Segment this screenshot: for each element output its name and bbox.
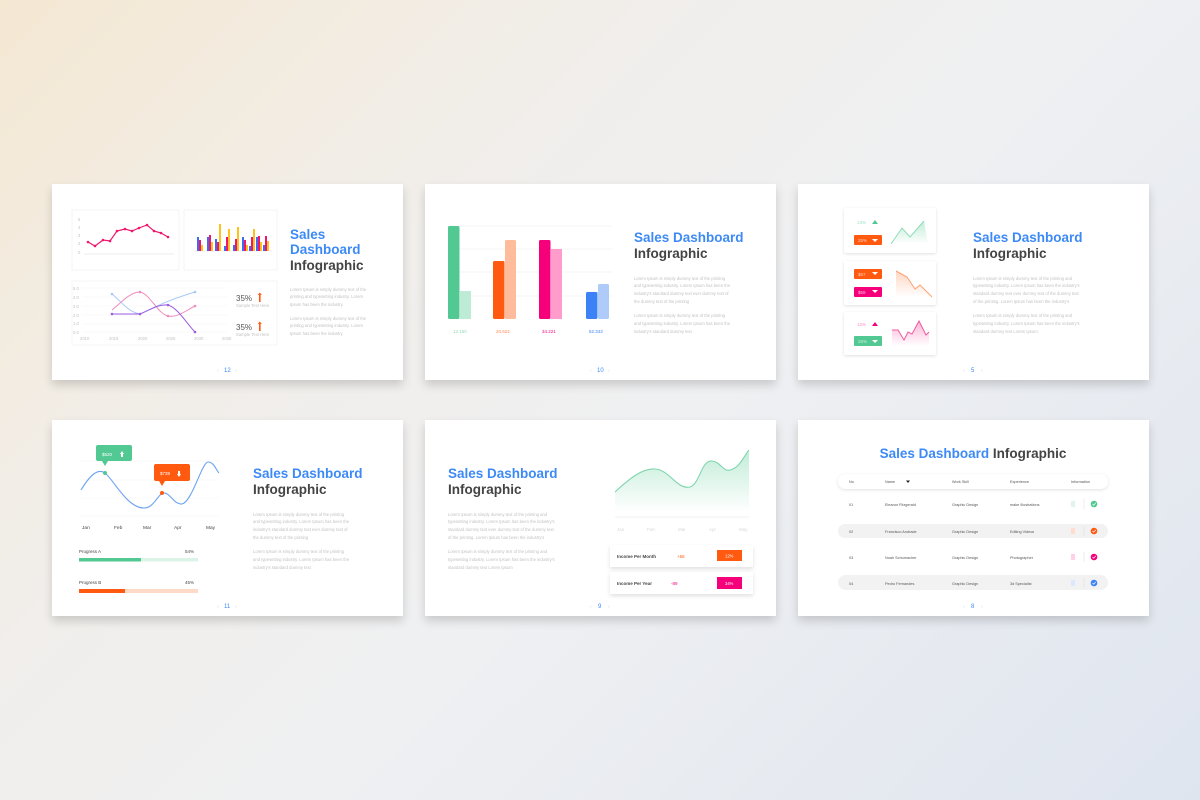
text block: and typesetting industry. Lorem Ipsum has been the <box>634 283 731 288</box>
card: income per month: Income Per Month <box>617 554 656 559</box>
panel: multi-line chart with stats: 2030 <box>194 336 204 341</box>
table: Graphic Design <box>952 503 978 507</box>
bar chart <box>448 226 612 334</box>
slide 2: bar chart <box>425 184 776 380</box>
table: No <box>849 480 854 484</box>
page number: ‹ <box>217 604 219 610</box>
slide 6: table <box>798 420 1149 616</box>
wave chart: Apr <box>174 525 182 531</box>
panel: multi-line chart with stats <box>72 281 277 345</box>
progress A: Progress A <box>79 549 101 554</box>
page number <box>590 368 610 374</box>
title: Infographic <box>634 246 708 261</box>
wave chart: $739 <box>160 471 171 476</box>
panel: multi-line chart with stats: 2020 <box>138 336 148 341</box>
title: Infographic <box>253 482 327 497</box>
table: 01 <box>849 503 853 507</box>
table: make Illustrations <box>1010 503 1040 507</box>
table: Eleanor Fitzgerald <box>885 503 916 507</box>
panel: pink line chart: 6 <box>78 217 81 222</box>
area chart: May <box>739 527 748 532</box>
table: Graphic Design <box>952 530 978 534</box>
text block: of the printing. Lorem Ipsum has been the industry's <box>973 299 1069 304</box>
progress A <box>79 549 198 562</box>
title: Sales Dashboard <box>448 466 558 481</box>
text block: Lorem Ipsum is simply dummy text of the printing <box>634 313 726 318</box>
text block: typesetting industry. Lorem Ipsum has been the industry's <box>973 321 1080 326</box>
text block: Lorem Ipsum is simply dummy text of the printing <box>253 512 345 517</box>
text block <box>448 512 555 570</box>
title: Sales Dashboard Infographic <box>880 446 1067 461</box>
title <box>634 230 744 261</box>
page number <box>217 368 237 374</box>
bar chart: 52.343 <box>589 329 603 334</box>
title <box>448 466 558 497</box>
text block: standard dummy text ever dummy text of the dummy text <box>973 291 1079 296</box>
area chart: Jan <box>617 527 625 532</box>
table: Photographer <box>1010 556 1034 560</box>
table <box>838 474 1108 590</box>
text block: the dummy text of the printing <box>253 535 309 540</box>
card: income per year: 34% <box>725 581 734 586</box>
page number: 8 <box>971 604 975 610</box>
wave chart <box>80 445 219 531</box>
text block: Lorem Ipsum is simply dummy text of the printing and <box>973 313 1073 318</box>
page number: › <box>235 368 237 374</box>
text block: industry's standard dummy text <box>634 329 693 334</box>
table: Name <box>885 480 895 484</box>
progress B <box>79 580 198 593</box>
text block: Ipsum has been the industry. <box>290 302 344 307</box>
text block: standard dummy text Lorem Ipsum <box>448 565 513 570</box>
wave chart: $520 <box>102 452 113 457</box>
panel: multi-line chart with stats: 2010 <box>80 336 90 341</box>
slide 3: KPI sparkline cards <box>798 184 1149 380</box>
page number: › <box>608 368 610 374</box>
title: Infographic <box>448 482 522 497</box>
page number <box>217 604 237 610</box>
text block: and typesetting industry. Lorem Ipsum has been the <box>253 519 350 524</box>
slide 5: area chart with income cards <box>425 420 776 616</box>
bar chart: 20.622 <box>496 329 510 334</box>
text block: and typesetting industry. Lorem Ipsum has been the <box>634 321 731 326</box>
card 1 <box>844 208 936 253</box>
panel: multi-line chart with stats: 2015 <box>109 336 119 341</box>
text block: Lorem Ipsum is simply dummy text of the <box>290 287 367 292</box>
page number: 10 <box>597 368 604 374</box>
panel: pink line chart <box>72 210 179 270</box>
page number: › <box>608 604 610 610</box>
card: income per year <box>610 572 753 594</box>
title <box>253 466 363 497</box>
bar chart: 34.221 <box>542 329 556 334</box>
text block: industry's standard dummy text <box>253 565 312 570</box>
page number: › <box>235 604 237 610</box>
text block <box>634 276 731 334</box>
title: Sales Dashboard <box>253 466 363 481</box>
page number: 9 <box>598 604 602 610</box>
text block: Lorem Ipsum is simply dummy text of the printing and <box>448 512 548 517</box>
panel: pink line chart: 0 <box>78 250 81 255</box>
wave chart: Feb <box>114 525 123 531</box>
panel: multi-line chart with stats: 2.0 <box>73 313 79 318</box>
panel: multi-line chart with stats: 0.0 <box>73 330 79 335</box>
text block: industry's standard dummy text ever dummy text of <box>634 291 729 296</box>
title: Dashboard <box>290 242 361 257</box>
area chart: Mar <box>678 527 686 532</box>
card 2: $59 <box>858 290 866 295</box>
table: 3d Specialist <box>1010 582 1032 586</box>
text block: typesetting industry. Lorem Ipsum has been the industry's <box>973 283 1080 288</box>
title: Sales Dashboard <box>634 230 744 245</box>
text block <box>253 512 350 570</box>
bar chart: 12.150 <box>453 329 467 334</box>
title: Sales Dashboard <box>973 230 1083 245</box>
card: income per month: 12% <box>725 554 734 558</box>
card 3 <box>844 312 936 355</box>
panel: pink line chart: 3 <box>78 233 81 238</box>
page number <box>963 368 983 374</box>
card 2: $67 <box>858 272 866 277</box>
panel: multi-line chart with stats: 3.0 <box>73 304 79 309</box>
text block: Ipsum has been the industry. <box>290 331 344 336</box>
panel: multi-line chart with stats: 5.0 <box>73 286 79 291</box>
page number: › <box>981 368 983 374</box>
text block: Lorem Ipsum is simply dummy text of the printing <box>634 276 726 281</box>
text block: printing and typesetting industry. Lorem <box>290 294 364 299</box>
text block <box>290 287 367 336</box>
card: income per month <box>610 545 753 567</box>
page number: 5 <box>971 368 975 374</box>
slide 1: line, bar and multi-line charts <box>52 184 403 380</box>
wave chart: Jan <box>82 525 90 531</box>
table: Graphic Design <box>952 582 978 586</box>
page number: 12 <box>224 368 231 374</box>
text block <box>973 276 1080 334</box>
panel: multi-line chart with stats: Sample Text Here <box>236 303 270 308</box>
title <box>290 227 364 273</box>
table: Noah Schumacher <box>885 556 917 560</box>
area chart <box>615 450 749 532</box>
text block: Lorem Ipsum is simply dummy text of the printing and <box>973 276 1073 281</box>
panel: grouped bar chart <box>184 210 277 270</box>
panel: multi-line chart with stats: 1.0 <box>73 321 79 326</box>
panel: multi-line chart with stats: 35% <box>236 323 252 332</box>
panel: multi-line chart with stats: 35% <box>236 294 252 303</box>
card: income per year: Income Per Year <box>617 581 652 586</box>
card 2 <box>844 261 936 305</box>
table: Information <box>1071 480 1090 484</box>
text block: Lorem Ipsum is simply dummy text of the printing <box>253 549 345 554</box>
title: Infographic <box>973 246 1047 261</box>
page number <box>590 604 610 610</box>
table: 03 <box>849 556 853 560</box>
slide 4: wave chart with progress bars <box>52 420 403 616</box>
text block: of the printing. Lorem Ipsum has been the industry's <box>448 535 544 540</box>
card 1: 25% <box>858 238 867 243</box>
card 1: 13% <box>857 220 866 225</box>
page number: ‹ <box>590 604 592 610</box>
text block: and typesetting industry. Lorem Ipsum has been the <box>253 557 350 562</box>
table: Graphic Design <box>952 556 978 560</box>
text block: standard dummy text ever dummy text of the dummy text <box>448 527 554 532</box>
text block: industry's standard dummy text ever dummy text of <box>253 527 348 532</box>
text block: printing and typesetting industry. Lorem <box>290 323 364 328</box>
panel: multi-line chart with stats: 2025 <box>166 336 176 341</box>
title: Infographic <box>290 258 364 273</box>
wave chart: May <box>206 525 216 531</box>
table: Experience <box>1010 480 1029 484</box>
text block: Lorem Ipsum is simply dummy text of the <box>290 316 367 321</box>
table: Francisco Andrade <box>885 530 917 534</box>
title <box>973 230 1083 261</box>
area chart: Feb <box>647 527 655 532</box>
panel: multi-line chart with stats: 2035 <box>222 336 232 341</box>
page number <box>963 604 983 610</box>
card: income per year: -89 <box>671 581 678 586</box>
text block: Lorem Ipsum is simply dummy text of the printing and <box>448 549 548 554</box>
card 3: 25% <box>858 339 867 344</box>
text block: typesetting industry. Lorem Ipsum has been the industry's <box>448 557 555 562</box>
title: Sales <box>290 227 325 242</box>
panel: pink line chart: 2 <box>78 241 81 246</box>
page number: ‹ <box>963 604 965 610</box>
card: income per month: +56 <box>677 554 685 559</box>
table: 04 <box>849 582 853 586</box>
progress A: 54% <box>185 549 194 554</box>
page number: › <box>981 604 983 610</box>
text block: standard dummy text Lorem Ipsum <box>973 329 1038 334</box>
text block: the dummy text of the printing <box>634 299 690 304</box>
page number: ‹ <box>217 368 219 374</box>
card 3: 12% <box>857 322 866 327</box>
wave chart: Mar <box>143 525 152 531</box>
table: 02 <box>849 530 853 534</box>
area chart: Apr <box>709 527 717 532</box>
panel: pink line chart: 4 <box>78 225 81 230</box>
panel: multi-line chart with stats: Sample Text Here <box>236 332 270 337</box>
table: Editing Videos <box>1010 530 1034 534</box>
page number: 11 <box>224 604 231 610</box>
panel: multi-line chart with stats: 4.0 <box>73 295 79 300</box>
progress B: Progress B <box>79 580 101 585</box>
page number: ‹ <box>963 368 965 374</box>
page number: ‹ <box>590 368 592 374</box>
text block: typesetting industry. Lorem Ipsum has been the industry's <box>448 519 555 524</box>
table: Work Skill <box>952 480 969 484</box>
progress B: 45% <box>185 580 194 585</box>
table: Pedro Fernandes <box>885 582 914 586</box>
